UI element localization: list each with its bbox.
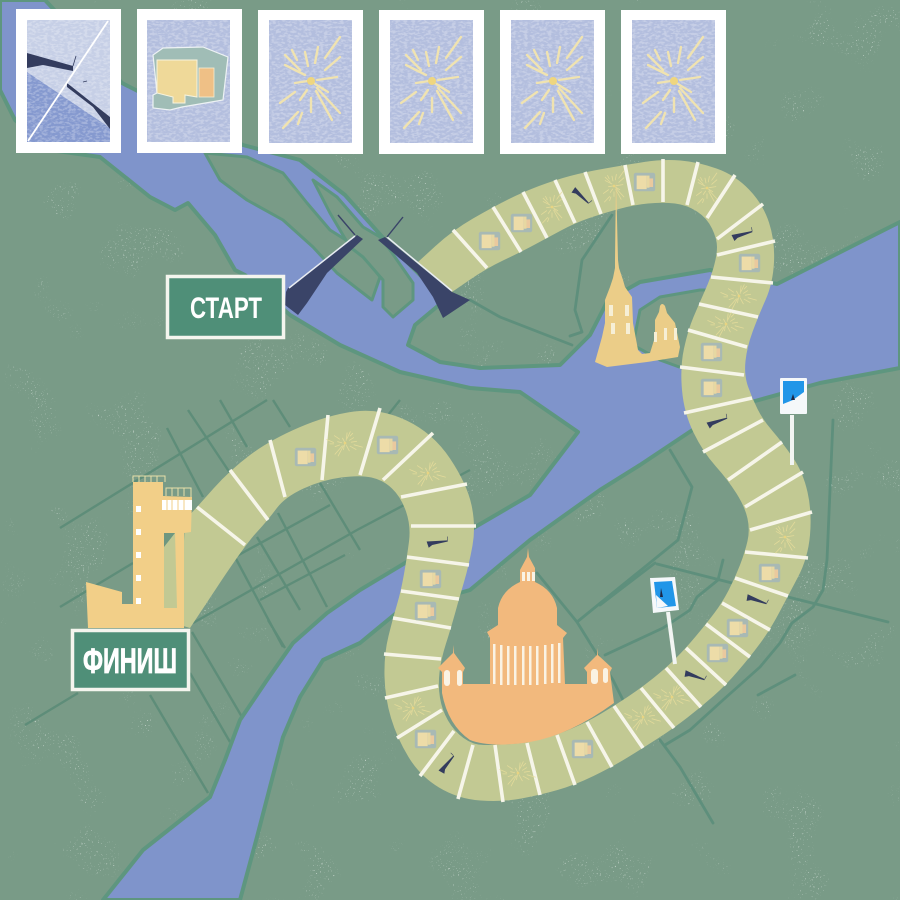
- finish label: ФИНИШ: [83, 642, 177, 681]
- islands in the delta: [205, 153, 712, 368]
- card: firework 1: [258, 10, 363, 154]
- card: house: [137, 9, 242, 153]
- St Isaac's Cathedral: [438, 548, 614, 745]
- streets: western district: [25, 400, 470, 793]
- card: firework 3: [500, 10, 605, 154]
- card: firework 4: [621, 10, 726, 154]
- tower opening: [164, 533, 177, 608]
- road sign: north: [780, 378, 807, 465]
- start label: СТАРТ: [190, 292, 262, 325]
- start label: [168, 276, 284, 338]
- card: bridge: [16, 9, 121, 153]
- streets: northern and eastern districts: [470, 215, 888, 823]
- game track: [180, 160, 811, 801]
- track cell dividers: [197, 159, 812, 802]
- drawbridge: right span: [378, 217, 470, 318]
- drawbridge: left span: [285, 215, 363, 315]
- road sign: south: [650, 577, 679, 664]
- icons: houses: [295, 173, 780, 758]
- track cell icons: [295, 171, 795, 788]
- icons: fireworks: [326, 171, 795, 788]
- Peter and Paul Cathedral: [595, 178, 680, 367]
- card: firework 2: [379, 10, 484, 154]
- icons: small bridges: [426, 186, 768, 775]
- finish tower: [86, 476, 192, 628]
- finish label: [72, 630, 188, 690]
